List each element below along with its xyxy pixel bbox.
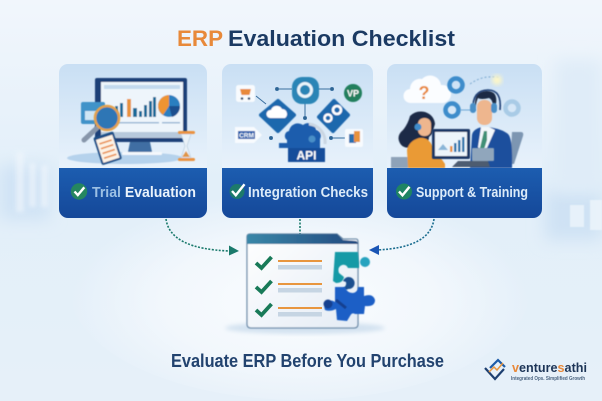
panel: trial evaluation — [59, 64, 207, 218]
illustration: laptop screen — [432, 129, 494, 167]
label band — [387, 168, 542, 218]
icon: checklist document with puzzle — [225, 234, 385, 334]
logo tagline: Integrated Ops. Simplified Growth — [511, 376, 586, 382]
checklist rows — [256, 257, 322, 316]
title: Evaluation Checklist — [228, 26, 456, 51]
panel: support and training — [387, 64, 542, 218]
icon: VP badge: VP — [347, 88, 359, 98]
teal puzzle piece — [333, 252, 370, 290]
arrow: integration to checklist — [299, 219, 301, 234]
label band — [59, 168, 207, 218]
illustration: monitor with charts — [67, 78, 187, 164]
logo: venturesathi — [485, 360, 587, 382]
icon: logo mark — [485, 360, 505, 379]
label: Trial Evaluation — [92, 185, 196, 201]
icon: clipboard — [93, 131, 122, 165]
document — [247, 234, 358, 328]
title: ERP — [177, 26, 223, 51]
icon: question cloud — [403, 75, 451, 103]
icon: CRM tag — [235, 127, 262, 143]
icon: check badge — [71, 183, 87, 200]
icon: shopping cart — [236, 85, 255, 102]
icon: cloud — [261, 101, 294, 131]
icons: gears — [446, 77, 518, 116]
icon: gears — [319, 101, 348, 131]
label band — [222, 168, 373, 218]
arrow: trial to checklist — [166, 219, 239, 256]
icon: VP badge — [344, 84, 362, 102]
label: Integration Checks — [248, 185, 368, 201]
wordmark: venturesathi — [512, 361, 587, 375]
tagline: Evaluate ERP Before You Purchase — [171, 351, 444, 371]
icon: hourglass — [178, 131, 195, 161]
icon: check badge — [230, 184, 244, 199]
connectors — [256, 88, 345, 140]
panel: integration checks — [222, 64, 373, 218]
icon: question cloud: ? — [418, 83, 430, 103]
blue puzzle piece — [324, 287, 375, 321]
icon: API puzzle cloud: API — [296, 148, 317, 162]
icon: check badge — [396, 184, 412, 200]
arrow: support to checklist — [369, 219, 434, 255]
label: Support & Training — [416, 185, 528, 201]
icon: calculator panel — [81, 102, 105, 124]
icon: CRM tag: CRM — [239, 132, 254, 140]
illustration: support agent — [470, 90, 523, 168]
icon: magnifier — [84, 106, 119, 140]
icon: sun glow — [492, 75, 502, 85]
illustration: customer — [391, 112, 445, 168]
icon: API puzzle cloud — [279, 123, 325, 162]
icon: app squares — [345, 129, 363, 147]
icon: top hub — [292, 77, 319, 104]
